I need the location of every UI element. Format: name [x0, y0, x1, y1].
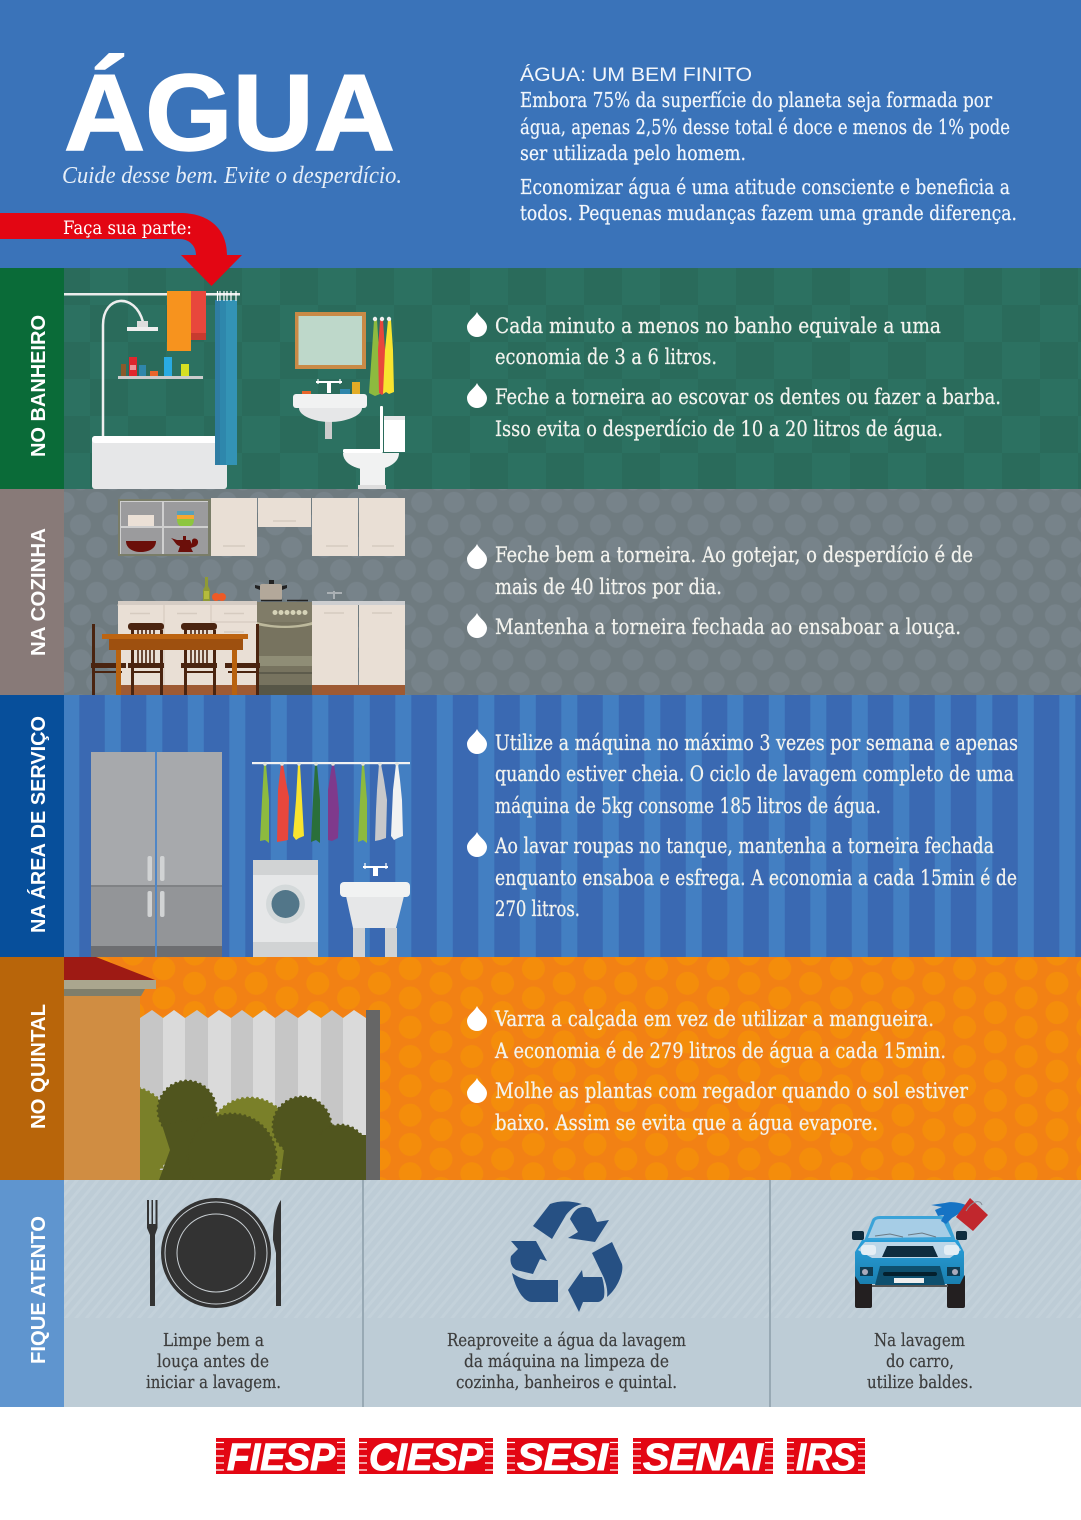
tip 1: Varra a calçada em vez de utilizar a mangueira. — [494, 1007, 934, 1031]
caption: dishes: Limpe bem a — [163, 1330, 264, 1351]
caption: car: utilize baldes. — [867, 1372, 973, 1393]
logo: IRS: IRS — [796, 1437, 856, 1479]
panel: header — [0, 0, 1081, 268]
tip 2 — [494, 834, 1017, 921]
icon: water drop — [467, 832, 487, 857]
tip 1: máquina de 5kg consome 185 litros de água. — [495, 794, 881, 818]
tip 2: Isso evita o desperdício de 10 a 20 litros de água. — [495, 417, 943, 441]
panel: no quintal — [0, 957, 1081, 1202]
tip 2: Molhe as plantas com regador quando o sol estiver — [495, 1079, 969, 1103]
caption: reuse water: cozinha, banheiros e quintal. — [456, 1372, 677, 1393]
illustration: counter and appliances — [118, 577, 405, 695]
illustration: bushes — [140, 1080, 366, 1180]
section label: NO BANHEIRO — [28, 315, 50, 457]
tip 1 — [494, 1007, 946, 1063]
tips text with water drops — [467, 729, 1018, 921]
tips text with water drops — [467, 543, 973, 639]
icon: car and bucket — [852, 1198, 988, 1308]
caption: car — [867, 1330, 973, 1393]
intro text — [520, 88, 1017, 225]
illustration: laundry tank — [340, 863, 410, 957]
tip 2 — [495, 385, 1001, 441]
caption: reuse water: da máquina na limpeza de — [464, 1351, 669, 1372]
tip 2 — [495, 1079, 969, 1135]
caption: dishes — [146, 1330, 281, 1393]
illustration: sink — [293, 379, 367, 439]
icon: water drop — [467, 613, 487, 638]
caption: car: Na lavagem — [874, 1330, 965, 1351]
section label: NA COZINHA — [28, 528, 50, 656]
tagline: Cuide desse bem. Evite o desperdício. — [62, 163, 402, 189]
arrow label: Faça sua parte: — [63, 218, 192, 239]
icon: water drop — [467, 383, 487, 408]
caption: dishes: louça antes de — [157, 1351, 269, 1372]
illustration: dining table and chairs — [91, 623, 260, 695]
tip 2: baixo. Assim se evita que a água evapore. — [495, 1111, 878, 1135]
illustration: fence — [140, 1010, 380, 1180]
panel: na area de servico — [0, 695, 1081, 957]
illustration: mirror — [295, 312, 366, 369]
caption: car: do carro, — [886, 1351, 954, 1372]
arrow: faça sua parte — [0, 213, 242, 286]
logo: CIESP: CIESP — [369, 1437, 484, 1479]
illustration: house wall and roof — [64, 957, 156, 1180]
panel: na cozinha — [0, 489, 1081, 695]
panel: fique atento — [0, 1180, 1081, 1407]
icon: water drop — [467, 729, 487, 754]
tips text with water drops — [467, 1006, 969, 1135]
title: ÁGUA — [64, 52, 395, 174]
tip 2: Feche a torneira ao escovar os dentes ou fazer a barba. — [495, 385, 1001, 409]
illustration: washing machine — [253, 860, 318, 957]
intro text: ser utilizada pelo homem. — [520, 141, 746, 165]
logo: SENAI: SENAI — [643, 1437, 764, 1479]
caption: reuse water: Reaproveite a água da lavagem — [447, 1330, 686, 1351]
tip 2: Mantenha a torneira fechada ao ensaboar a louça. — [495, 615, 961, 639]
tip 1: economia de 3 a 6 litros. — [495, 345, 717, 369]
tip 1: Cada minuto a menos no banho equivale a uma — [495, 314, 941, 338]
tip 1 — [495, 314, 941, 369]
tip 2: 270 litros. — [495, 897, 580, 921]
caption: reuse water — [447, 1330, 686, 1393]
illustration: cabinet — [91, 752, 222, 957]
tip 1 — [495, 731, 1018, 818]
tip 1: A economia é de 279 litros de água a cada 15min. — [494, 1039, 946, 1063]
icon: water drop — [467, 544, 487, 569]
tip 1: mais de 40 litros por dia. — [495, 575, 722, 599]
caption: dishes: iniciar a lavagem. — [146, 1372, 281, 1393]
section label: FIQUE ATENTO — [28, 1216, 50, 1364]
intro heading: ÁGUA: UM BEM FINITO — [520, 63, 752, 86]
tip 2: Ao lavar roupas no tanque, mantenha a torneira fechada — [494, 834, 994, 858]
intro text: Embora 75% da superfície do planeta seja formada por — [520, 88, 992, 112]
icon: recycling arrows — [511, 1201, 622, 1312]
panel: no banheiro — [0, 268, 1081, 489]
icon: water drop — [467, 1006, 487, 1031]
tip 1 — [495, 543, 973, 599]
illustration: bathtub and shower — [64, 291, 240, 489]
icon: water drop — [467, 312, 487, 337]
section label: NO QUINTAL — [28, 1004, 50, 1129]
illustration: toilet — [343, 406, 405, 489]
tips text with water drops — [467, 312, 1001, 441]
icon: plate and cutlery — [147, 1198, 281, 1308]
panel: logos footer — [0, 1407, 1081, 1520]
logo: FIESP: FIESP — [227, 1437, 336, 1479]
tip 1: Feche bem a torneira. Ao gotejar, o desperdício é de — [495, 543, 973, 567]
illustration: hanging towels — [369, 317, 394, 396]
logo: SESI: SESI — [517, 1437, 610, 1479]
icon: water drop — [467, 1078, 487, 1103]
illustration: clothesline — [252, 762, 410, 843]
illustration: upper cabinets — [118, 498, 405, 556]
section label: NA ÁREA DE SERVIÇO — [27, 716, 50, 933]
